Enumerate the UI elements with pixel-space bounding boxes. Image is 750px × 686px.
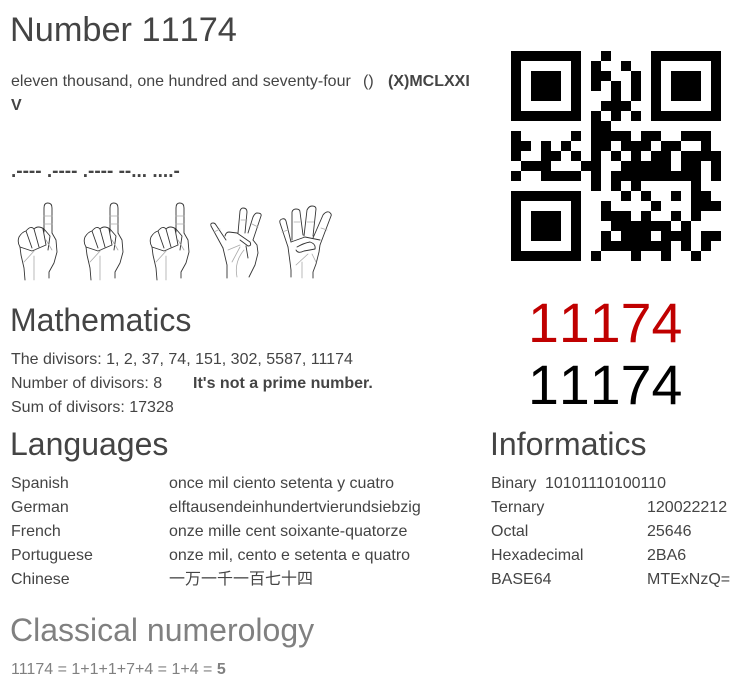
informatics table: MTExNzQ= [647, 571, 730, 588]
mathematics facts: Number of divisors: 8 [11, 375, 162, 392]
languages table: Chinese [11, 571, 70, 588]
languages table: German [11, 499, 69, 516]
informatics table: Binary [491, 475, 536, 492]
icon: hand sign one [84, 203, 123, 280]
heading: Classical numerology: Classical numerology [10, 612, 314, 648]
languages table: 一万一千一百七十四 [169, 570, 313, 588]
informatics table: Octal [491, 523, 528, 540]
mathematics facts: The divisors: 1, 2, 37, 74, 151, 302, 5587, 11174 [11, 351, 353, 368]
informatics table: Hexadecimal [491, 547, 583, 564]
number in words and roman numeral: (X)MCLXXI [388, 73, 470, 90]
number in words and roman numeral: V [11, 97, 22, 114]
icon: hand sign seven [211, 208, 261, 278]
sign language hands [18, 203, 331, 280]
mathematics facts [11, 351, 373, 416]
black large number: 11174 [528, 354, 682, 416]
languages table: Portuguese [11, 547, 93, 564]
red large number: 11174 [528, 292, 682, 354]
informatics table: Ternary [491, 499, 544, 516]
icon: hand sign one [150, 203, 189, 280]
icon: hand sign one [18, 203, 57, 280]
informatics table [491, 475, 730, 588]
QR code [511, 51, 721, 261]
number in words and roman numeral: () [363, 73, 374, 90]
number in words and roman numeral [11, 73, 470, 114]
languages table: Spanish [11, 475, 69, 492]
informatics table: 10101110100110 [545, 475, 666, 492]
languages table: onze mil, cento e setenta e quatro [169, 547, 410, 564]
mathematics facts: It's not a prime number. [193, 375, 373, 392]
informatics table: 120022212 [647, 499, 727, 516]
languages table: once mil ciento setenta y cuatro [169, 475, 394, 492]
informatics table: 25646 [647, 523, 692, 540]
numerology sum: 11174 = 1+1+1+7+4 = 1+4 = 5 [11, 661, 226, 678]
languages table [11, 475, 421, 588]
morse code: .---- .---- .---- --... ....- [11, 161, 180, 182]
languages table: French [11, 523, 61, 540]
informatics table: 2BA6 [647, 547, 686, 564]
heading: Informatics: Informatics [490, 426, 646, 462]
languages table: onze mille cent soixante-quatorze [169, 523, 407, 540]
number in words and roman numeral: eleven thousand, one hundred and seventy-four [11, 73, 351, 90]
heading: Languages: Languages [10, 426, 168, 462]
mathematics facts: Sum of divisors: 17328 [11, 399, 174, 416]
heading: Mathematics: Mathematics [10, 302, 191, 338]
title: Number 11174 [10, 11, 237, 49]
icon: hand sign four [280, 206, 331, 278]
informatics table: BASE64 [491, 571, 552, 588]
languages table: elftausendeinhundertvierundsiebzig [169, 499, 421, 516]
